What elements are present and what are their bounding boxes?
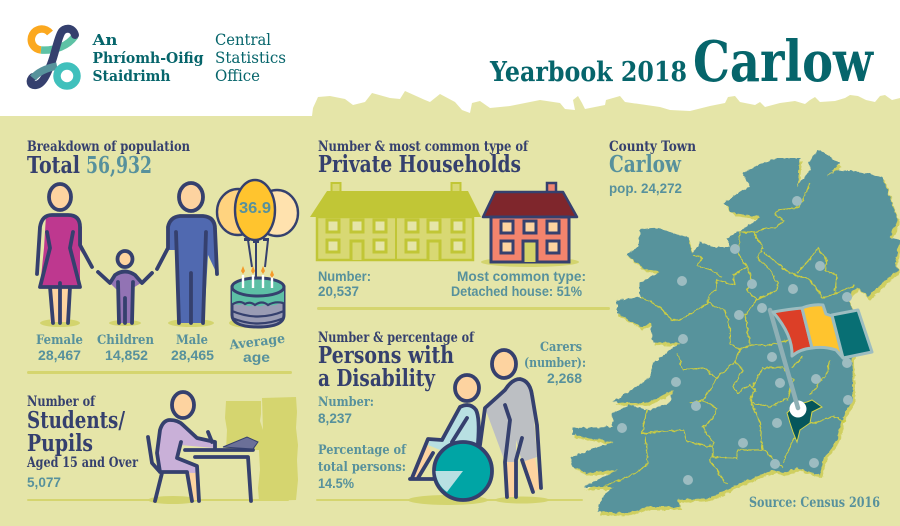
county town label [609, 139, 696, 196]
figure labels: 14,852 [105, 348, 148, 363]
panel: students [26, 392, 298, 504]
figure labels: 28,467 [38, 348, 81, 363]
logo text: English name: Statistics [215, 48, 286, 67]
county town label: County Town [609, 139, 696, 155]
students text: Number of [27, 394, 96, 410]
students text: Pupils [27, 430, 93, 457]
households heading [318, 139, 529, 178]
county borders [603, 183, 855, 487]
population heading: 56,932 [86, 152, 152, 179]
households figures: Most common type: [457, 269, 586, 284]
logo text: Irish name: An [91, 31, 118, 49]
disability heading: a Disability [318, 365, 436, 392]
logo text: Irish name [91, 31, 204, 85]
icon: female figure [37, 184, 92, 327]
population heading [27, 139, 190, 179]
carers figure [524, 340, 586, 386]
logo text: English name: Central [215, 30, 271, 49]
icon: stacks of books [225, 397, 298, 501]
panel: disability [316, 330, 586, 505]
logo mark [31, 29, 77, 86]
icon: carer pushing wheelchair [408, 350, 549, 505]
disability figures: Number: [318, 395, 374, 410]
icon: student at desk [148, 392, 258, 504]
households figures: Detached house: 51% [451, 284, 582, 299]
disability figures: total persons: [318, 460, 406, 475]
average age value: 36.9 [239, 200, 271, 217]
figure labels: 28,465 [171, 348, 215, 363]
title: Yearbook 2018 [489, 57, 687, 88]
disability heading [318, 330, 475, 392]
town markers [617, 196, 853, 485]
figure labels: Male [176, 333, 208, 348]
carers figure: (number): [524, 356, 586, 371]
figure labels: Female [36, 333, 83, 348]
students text [26, 394, 138, 490]
disability heading: Persons with [318, 342, 454, 369]
households figures: Number: [318, 269, 371, 284]
disability heading: Number & percentage of [318, 330, 475, 346]
students text: Students/ [27, 407, 125, 434]
wheel pie: percentage [434, 442, 492, 500]
figure labels [36, 332, 286, 365]
map outline with coastal shadow [570, 150, 900, 516]
figure labels: Average [228, 332, 286, 353]
figure labels: age [243, 350, 271, 365]
logo text: Irish name: Phríomh-Oifig [92, 49, 204, 67]
county town label: pop. 24,272 [609, 181, 682, 196]
population heading: Total [27, 152, 80, 179]
students text: 5,077 [27, 474, 61, 490]
carers figure: 2,268 [547, 370, 582, 386]
households heading: Private Households [318, 151, 521, 178]
logo [31, 29, 286, 86]
icon: terraced houses [310, 183, 481, 260]
flag marker [770, 305, 872, 418]
panel: population [27, 139, 298, 365]
logo text: English name: Office [215, 66, 260, 85]
icon: child figure [98, 251, 152, 326]
households figures: 20,537 [318, 284, 359, 299]
households heading: Number & most common type of [318, 139, 529, 155]
disability figures: Percentage of [318, 443, 407, 458]
county highlight: Carlow [787, 400, 822, 442]
disability figures [318, 395, 407, 491]
logo text: Irish name: Staidrimh [92, 67, 171, 85]
title [489, 29, 874, 95]
map: Ireland [570, 150, 900, 516]
panel: households [310, 139, 586, 299]
students text: Aged 15 and Over [26, 455, 138, 471]
carers figure: Carers [540, 340, 582, 355]
icon: balloons and cake [217, 180, 298, 328]
disability figures: 14.5% [318, 475, 354, 491]
population heading: Breakdown of population [27, 139, 190, 155]
county town label: Carlow [609, 151, 682, 178]
logo text: English name [215, 30, 286, 85]
figure labels: Children [97, 333, 154, 348]
icon: detached house [481, 183, 579, 267]
households figures [318, 269, 586, 299]
disability figures: 8,237 [318, 410, 352, 426]
icon: male figure [157, 183, 217, 327]
